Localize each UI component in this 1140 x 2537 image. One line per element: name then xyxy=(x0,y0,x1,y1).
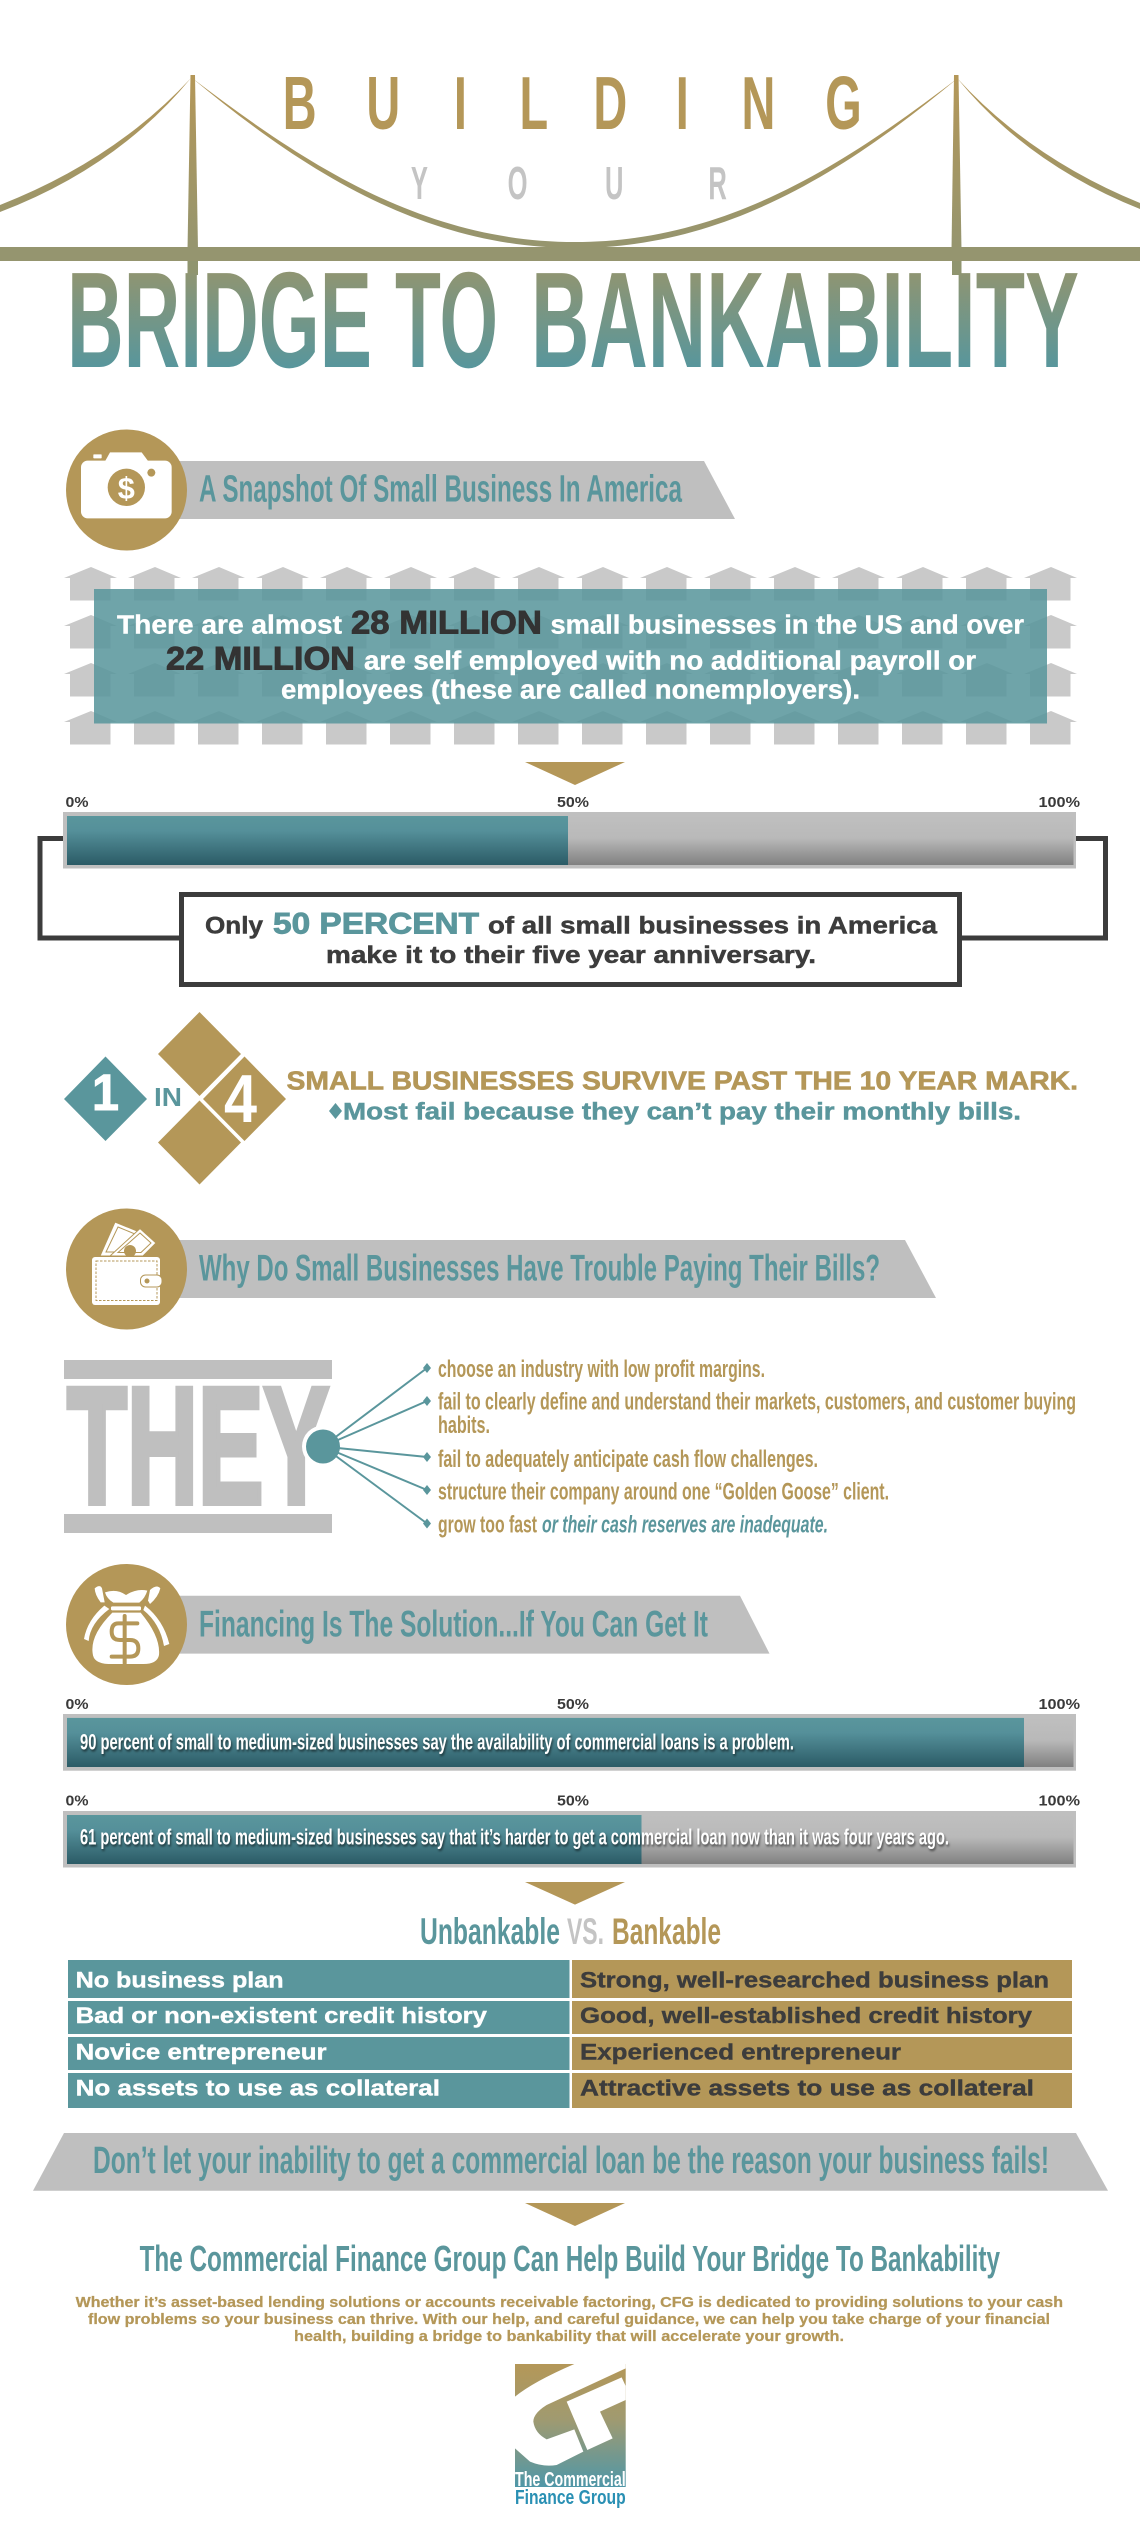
reasons list: or their cash reserves are inadequate. xyxy=(542,1512,828,1539)
axis labels: 50% xyxy=(557,1697,589,1713)
logo mark xyxy=(515,2364,626,2487)
houses pattern with stat box xyxy=(64,567,1077,744)
section header: financing xyxy=(66,1564,770,1685)
comparison heading: Unbankable xyxy=(420,1911,560,1952)
stat text xyxy=(117,604,1024,705)
stat text: There are almost xyxy=(117,612,343,640)
bar text: 90 percent of small to medium-sized businesses say the availability of commercial loans is a problem. xyxy=(80,1729,794,1754)
bridge illustration xyxy=(0,75,1140,275)
unbankable column xyxy=(68,1960,570,2108)
unbankable column: No business plan xyxy=(76,1968,284,1992)
axis labels xyxy=(66,795,1080,811)
right cable xyxy=(957,78,1140,209)
teal diamond with 1 xyxy=(64,1056,147,1141)
heading: A Snapshot Of Small Business In America xyxy=(199,468,683,510)
in label: IN xyxy=(154,1082,182,1112)
axis labels: 100% xyxy=(1038,1697,1080,1713)
axis labels: 0% xyxy=(66,1697,89,1713)
bankable column: Strong, well-researched business plan xyxy=(580,1968,1049,1992)
arrow: down xyxy=(525,2203,625,2226)
1 in 4 subline: Most fail because they can’t pay their monthly bills. xyxy=(343,1098,1021,1125)
houses pattern xyxy=(64,567,1077,744)
comparison heading: Bankable xyxy=(612,1911,721,1952)
unbankable column: Novice entrepreneur xyxy=(76,2039,327,2064)
left tower xyxy=(188,75,198,250)
bar track xyxy=(63,1714,1076,1771)
reasons list: choose an industry with low profit margins. xyxy=(438,1356,765,1383)
right tower xyxy=(952,75,962,250)
banner: warning xyxy=(33,2133,1108,2191)
bar fill xyxy=(67,1718,1024,1767)
banner xyxy=(170,1596,770,1654)
they graphic xyxy=(64,1354,431,1539)
axis labels: 100% xyxy=(1038,1794,1080,1810)
bankable column: Attractive assets to use as collateral xyxy=(580,2075,1034,2100)
reasons list xyxy=(438,1356,1076,1539)
reasons list: fail to adequately anticipate cash flow challenges. xyxy=(438,1446,818,1473)
hub white halo xyxy=(302,1426,344,1468)
banner xyxy=(170,1240,936,1298)
axis labels: 50% xyxy=(557,795,589,811)
section header: snapshot xyxy=(66,430,735,550)
stat text: 22 MILLION xyxy=(166,640,355,676)
hub xyxy=(306,1430,340,1464)
centre cable xyxy=(192,78,958,248)
bar fill xyxy=(67,816,568,865)
arrow: down xyxy=(525,1882,625,1905)
title: building: BUILDING xyxy=(283,62,862,146)
61 percent chart xyxy=(63,1794,1080,1868)
stat text: small businesses in the US and over xyxy=(550,612,1024,640)
gold diamonds with 4: 4 xyxy=(224,1061,257,1137)
logo text line 1: The Commercial xyxy=(515,2469,626,2491)
bar track xyxy=(63,1811,1076,1868)
arrow: down xyxy=(525,762,625,785)
unbankable column: No assets to use as collateral xyxy=(76,2075,440,2100)
callout: 50 percent xyxy=(182,894,960,984)
50 percent chart xyxy=(40,795,1106,938)
axis labels: 100% xyxy=(1038,795,1080,811)
logo: the commercial finance group xyxy=(515,2364,626,2509)
bridge deck xyxy=(0,247,1140,261)
reasons list: habits. xyxy=(438,1412,490,1439)
callout: 50 percent: Only xyxy=(205,912,264,940)
gold diamonds with 4 xyxy=(158,1012,286,1184)
reasons list: structure their company around one “Golden Goose” client. xyxy=(438,1478,889,1506)
icon: camera: $ xyxy=(118,471,135,505)
dots xyxy=(423,1363,431,1528)
stat text: are self employed with no additional payroll or xyxy=(364,648,976,676)
logo text line 2: Finance Group xyxy=(515,2487,626,2509)
comparison table xyxy=(68,1960,1072,2108)
title: bridge to bankability: TO xyxy=(395,243,498,396)
callout: 50 percent: make it to their five year anniversary. xyxy=(326,942,816,969)
axis labels: 0% xyxy=(66,1794,89,1810)
axis labels xyxy=(66,1697,1080,1713)
reasons list: grow too fast xyxy=(438,1512,537,1539)
title: your: YOUR xyxy=(411,157,727,209)
icon: wallet xyxy=(66,1208,187,1330)
closing paragraph: Whether it’s asset-based lending solutions or accounts receivable factoring, CFG is dedicated to providing solutions to your cash xyxy=(76,2295,1063,2311)
teal diamond with 1: 1 xyxy=(92,1064,119,1121)
banner xyxy=(170,461,735,519)
left cable xyxy=(0,78,191,212)
callout: 50 percent: of all small businesses in America xyxy=(488,912,938,940)
icon: camera xyxy=(66,430,187,550)
closing paragraph xyxy=(76,2295,1063,2345)
comparison heading: VS. xyxy=(567,1911,604,1952)
section header: trouble paying bills xyxy=(66,1208,936,1330)
axis labels xyxy=(66,1794,1080,1810)
tower stubs below deck xyxy=(188,261,962,275)
bottom bar xyxy=(64,1514,332,1533)
unbankable column: Bad or non-existent credit history xyxy=(76,2003,488,2028)
comparison heading xyxy=(420,1911,721,1952)
connector bracket xyxy=(40,838,1106,938)
bar fill xyxy=(67,1815,642,1864)
stat text: 28 MILLION xyxy=(351,604,542,640)
teal stat box xyxy=(94,589,1047,724)
closing paragraph: flow problems so your business can thrive. With our help, and careful guidance, we can help you take charge of your financial xyxy=(88,2312,1050,2328)
1 in 4 headline: SMALL BUSINESSES SURVIVE PAST THE 10 YEAR MARK. xyxy=(286,1068,1078,1096)
title: bridge to bankability: BRIDGE xyxy=(67,243,372,396)
bar track xyxy=(63,812,1076,868)
connector lines xyxy=(323,1368,427,1524)
bankable column: Good, well-established credit history xyxy=(580,2003,1033,2028)
axis labels: 50% xyxy=(557,1794,589,1810)
stat text: employees (these are called nonemployers). xyxy=(281,677,860,705)
closing paragraph: health, building a bridge to bankability that will accelerate your growth. xyxy=(294,2329,844,2345)
top bar xyxy=(64,1360,332,1379)
they word: THEY xyxy=(67,1354,329,1539)
bankable column: Experienced entrepreneur xyxy=(580,2039,901,2064)
heading: Financing Is The Solution...If You Can Get It xyxy=(199,1603,708,1644)
callout: 50 percent: 50 PERCENT xyxy=(273,908,479,940)
bankable column xyxy=(572,1960,1072,2108)
axis labels: 0% xyxy=(66,795,89,811)
title: bridge to bankability xyxy=(67,243,1079,396)
icon: money bag xyxy=(66,1564,187,1685)
90 percent chart xyxy=(63,1697,1080,1771)
1 in 4 graphic xyxy=(64,1012,286,1184)
